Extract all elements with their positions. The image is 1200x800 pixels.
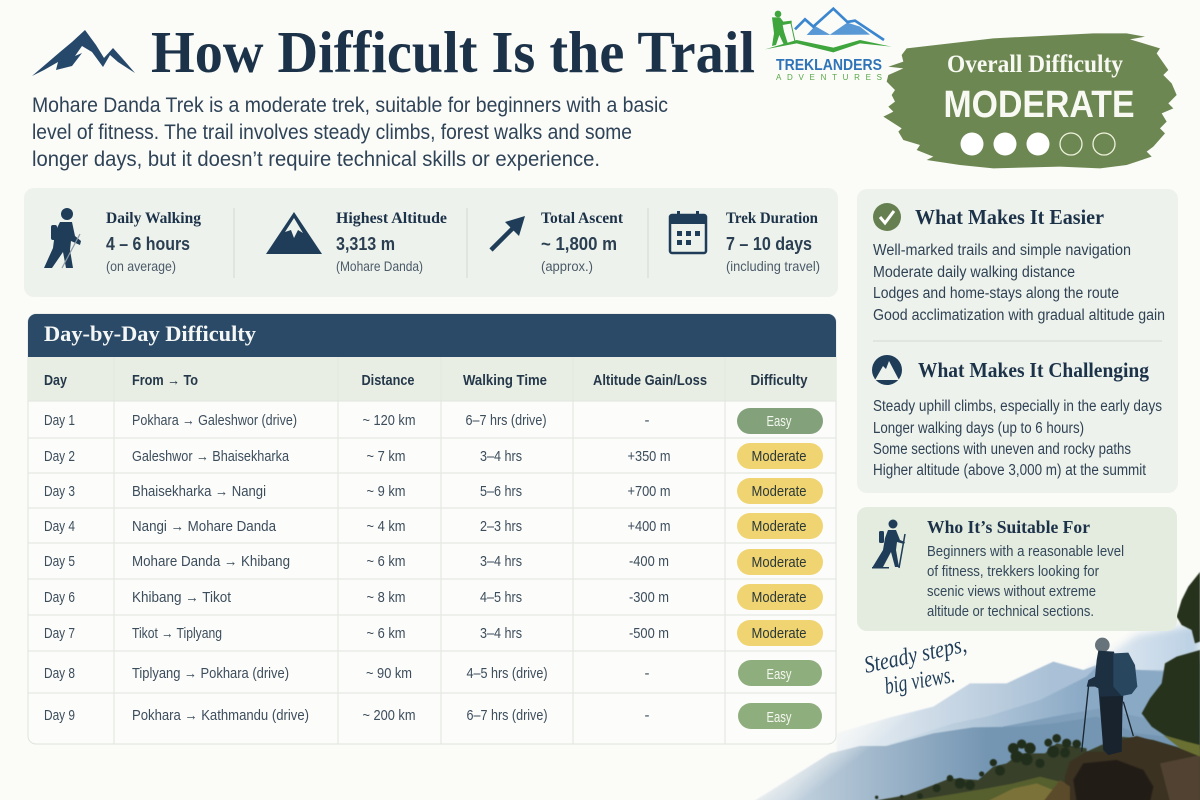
stat: total ascent: Total Ascent [541, 210, 624, 227]
table header row: Distance [362, 372, 414, 389]
row: day 1: Easy [766, 413, 792, 430]
row: day 1 [44, 408, 823, 434]
panel: day-by-day table [28, 314, 836, 744]
row: day 7: Moderate [752, 625, 806, 642]
title: How Difficult Is the Trail [151, 19, 755, 85]
body: suitable for: Beginners with a reasonable level [927, 543, 1124, 560]
row: day 5: Day 5 [44, 553, 75, 570]
body: suitable for: scenic views without extreme [927, 583, 1096, 600]
row: day 4: 2–3 hrs [480, 518, 522, 535]
row: day 5: Mohare Danda → Khibang [132, 553, 290, 570]
stat: highest altitude [336, 210, 447, 274]
tagline [862, 632, 969, 700]
icon: mountain logo beside title [32, 30, 135, 76]
row: day 8 [44, 660, 822, 686]
table header row [44, 372, 808, 389]
stat: total ascent [541, 210, 624, 274]
heading: suitable for: Who It’s Suitable For [927, 517, 1090, 537]
stat: daily walking: 4 – 6 hours [106, 234, 190, 254]
row: day 5: -400 m [629, 553, 669, 570]
row: day 5: Moderate [752, 554, 806, 571]
row: day 9: Easy [766, 709, 792, 726]
row: day 4: Day 4 [44, 518, 75, 535]
row: day 2: +350 m [628, 448, 670, 465]
table header row: Walking Time [463, 372, 547, 389]
stat: total ascent: (approx.) [541, 258, 593, 274]
list: challenging: Steady uphill climbs, especially in the early days [873, 398, 1162, 415]
table heading [28, 314, 836, 357]
list: easier: Well-marked trails and simple navigation [873, 242, 1131, 259]
badge: overall difficulty: Overall Difficulty [947, 51, 1123, 78]
body: suitable for: altitude or technical sections. [927, 603, 1094, 620]
row: day 5 [44, 549, 823, 575]
row: day 4: +400 m [628, 518, 670, 535]
row: day 2: ~ 7 km [366, 448, 406, 465]
row: day 2: 3–4 hrs [480, 448, 522, 465]
intro text: level of fitness. The trail involves steady climbs, forest walks and some [32, 121, 632, 144]
row: day 5: 3–4 hrs [480, 553, 522, 570]
panel: easier and challenging [857, 189, 1178, 493]
heading: what makes it easier: What Makes It Easier [915, 205, 1104, 229]
row: day 3: Day 3 [44, 483, 75, 500]
logo: Treklanders Adventures: TREKLANDERS [776, 57, 882, 74]
stat: highest altitude: Highest Altitude [336, 210, 447, 227]
logo: Treklanders Adventures: ADVENTURES [776, 73, 882, 82]
heading: what makes it challenging: What Makes It Challenging [918, 358, 1149, 382]
list: easier [873, 242, 1165, 324]
stat: total ascent: ~ 1,800 m [541, 234, 617, 254]
stat: daily walking: (on average) [106, 258, 176, 274]
row: day 1: 6–7 hrs (drive) [466, 412, 547, 429]
panel: key stats [24, 188, 838, 297]
row: day 8: Day 8 [44, 665, 75, 682]
body: suitable for: of fitness, trekkers looking for [927, 563, 1099, 580]
row: day 9: Pokhara → Kathmandu (drive) [132, 707, 309, 724]
hiker [1082, 638, 1137, 755]
row: day 3: +700 m [628, 483, 670, 500]
row: day 4: Moderate [752, 518, 806, 535]
icon: hiker [872, 520, 905, 568]
row: day 2: Day 2 [44, 448, 75, 465]
row: day 5: ~ 6 km [366, 553, 406, 570]
row: day 6: ~ 8 km [366, 589, 406, 606]
row: day 3: 5–6 hrs [480, 483, 522, 500]
row: day 8: 4–5 hrs (drive) [466, 665, 548, 682]
stat: trek duration: Trek Duration [726, 210, 818, 227]
intro text [32, 94, 668, 171]
row: day 9: - [644, 707, 650, 724]
logo: Treklanders Adventures [765, 9, 892, 82]
row: day 3: Bhaisekharka → Nangi [132, 483, 266, 500]
row: day 9: 6–7 hrs (drive) [466, 707, 548, 724]
table heading: Day-by-Day Difficulty [44, 321, 256, 346]
body: suitable for [927, 543, 1124, 620]
stat: trek duration: 7 – 10 days [726, 234, 812, 254]
stat: daily walking: Daily Walking [106, 210, 201, 227]
row: day 6: -300 m [629, 589, 669, 606]
stat: trek duration [726, 210, 820, 274]
badge: overall difficulty: MODERATE [944, 84, 1134, 126]
row: day 6: 4–5 hrs [480, 589, 522, 606]
row: day 7: -500 m [629, 625, 669, 642]
table header row: Altitude Gain/Loss [593, 372, 707, 389]
table header row: From → To [132, 372, 198, 389]
trees [1142, 572, 1200, 748]
row: day 2 [44, 443, 823, 469]
stat: highest altitude: (Mohare Danda) [336, 258, 423, 274]
stat: highest altitude: 3,313 m [336, 234, 395, 254]
icon: calendar [670, 211, 706, 253]
row: day 1: ~ 120 km [362, 412, 416, 429]
stat: daily walking [106, 210, 201, 274]
panel: who it's suitable for [857, 507, 1177, 631]
table header row: Difficulty [750, 372, 808, 389]
row: day 9: ~ 200 km [362, 707, 416, 724]
row: day 7: ~ 6 km [366, 625, 406, 642]
row: day 4 [44, 513, 823, 539]
row: day 9 [44, 703, 822, 729]
icon: ascent arrow [491, 216, 525, 250]
row: day 1: Pokhara → Galeshwor (drive) [132, 412, 297, 429]
row: day 7: Tikot → Tiplyang [132, 625, 222, 642]
row: day 9: Day 9 [44, 707, 75, 724]
icon: mountain [266, 212, 322, 254]
stat: trek duration: (including travel) [726, 258, 820, 274]
icon: hiker walking [44, 208, 81, 268]
row: day 6: Khibang → Tikot [132, 589, 232, 606]
list: challenging [873, 398, 1162, 479]
intro text: longer days, but it doesn’t require technical skills or experience. [32, 148, 600, 171]
row: day 4: ~ 4 km [366, 518, 406, 535]
row: day 8: ~ 90 km [366, 665, 412, 682]
icon: check [873, 203, 901, 231]
tagline: big views. [883, 662, 957, 700]
list: challenging: Some sections with uneven and rocky paths [873, 441, 1131, 458]
badge: overall difficulty [883, 33, 1177, 168]
row: day 7 [44, 620, 823, 646]
list: easier: Lodges and home-stays along the route [873, 285, 1119, 302]
row: day 2: Moderate [752, 448, 806, 465]
list: challenging: Higher altitude (above 3,000 m) at the summit [873, 462, 1147, 479]
logo mark [765, 9, 892, 52]
tagline: Steady steps, [862, 632, 969, 679]
row: day 8: - [644, 665, 650, 682]
landscape photo: mountains, trees and hiker [753, 572, 1200, 800]
row: day 6: Moderate [752, 589, 806, 606]
row: day 8: Tiplyang → Pokhara (drive) [132, 665, 289, 682]
row: day 4: Nangi → Mohare Danda [132, 518, 277, 535]
intro text: Mohare Danda Trek is a moderate trek, suitable for beginners with a basic [32, 94, 668, 117]
row: day 6: Day 6 [44, 589, 75, 606]
bushes [870, 737, 1200, 800]
row: day 2: Galeshwor → Bhaisekharka [132, 448, 290, 465]
rocks [1063, 736, 1200, 800]
list: challenging: Longer walking days (up to 6 hours) [873, 420, 1084, 437]
row: day 3 [44, 478, 823, 504]
row: day 3: Moderate [752, 483, 806, 500]
row: day 7: Day 7 [44, 625, 75, 642]
table header row: Day [44, 372, 68, 389]
icon: mountain badge [872, 355, 902, 385]
row: day 3: ~ 9 km [366, 483, 406, 500]
row: day 8: Easy [766, 666, 792, 683]
list: easier: Moderate daily walking distance [873, 264, 1075, 281]
list: easier: Good acclimatization with gradual altitude gain [873, 307, 1165, 324]
row: day 6 [44, 584, 823, 610]
row: day 1: Day 1 [44, 412, 75, 429]
row: day 1: - [644, 412, 650, 429]
row: day 7: 3–4 hrs [480, 625, 522, 642]
